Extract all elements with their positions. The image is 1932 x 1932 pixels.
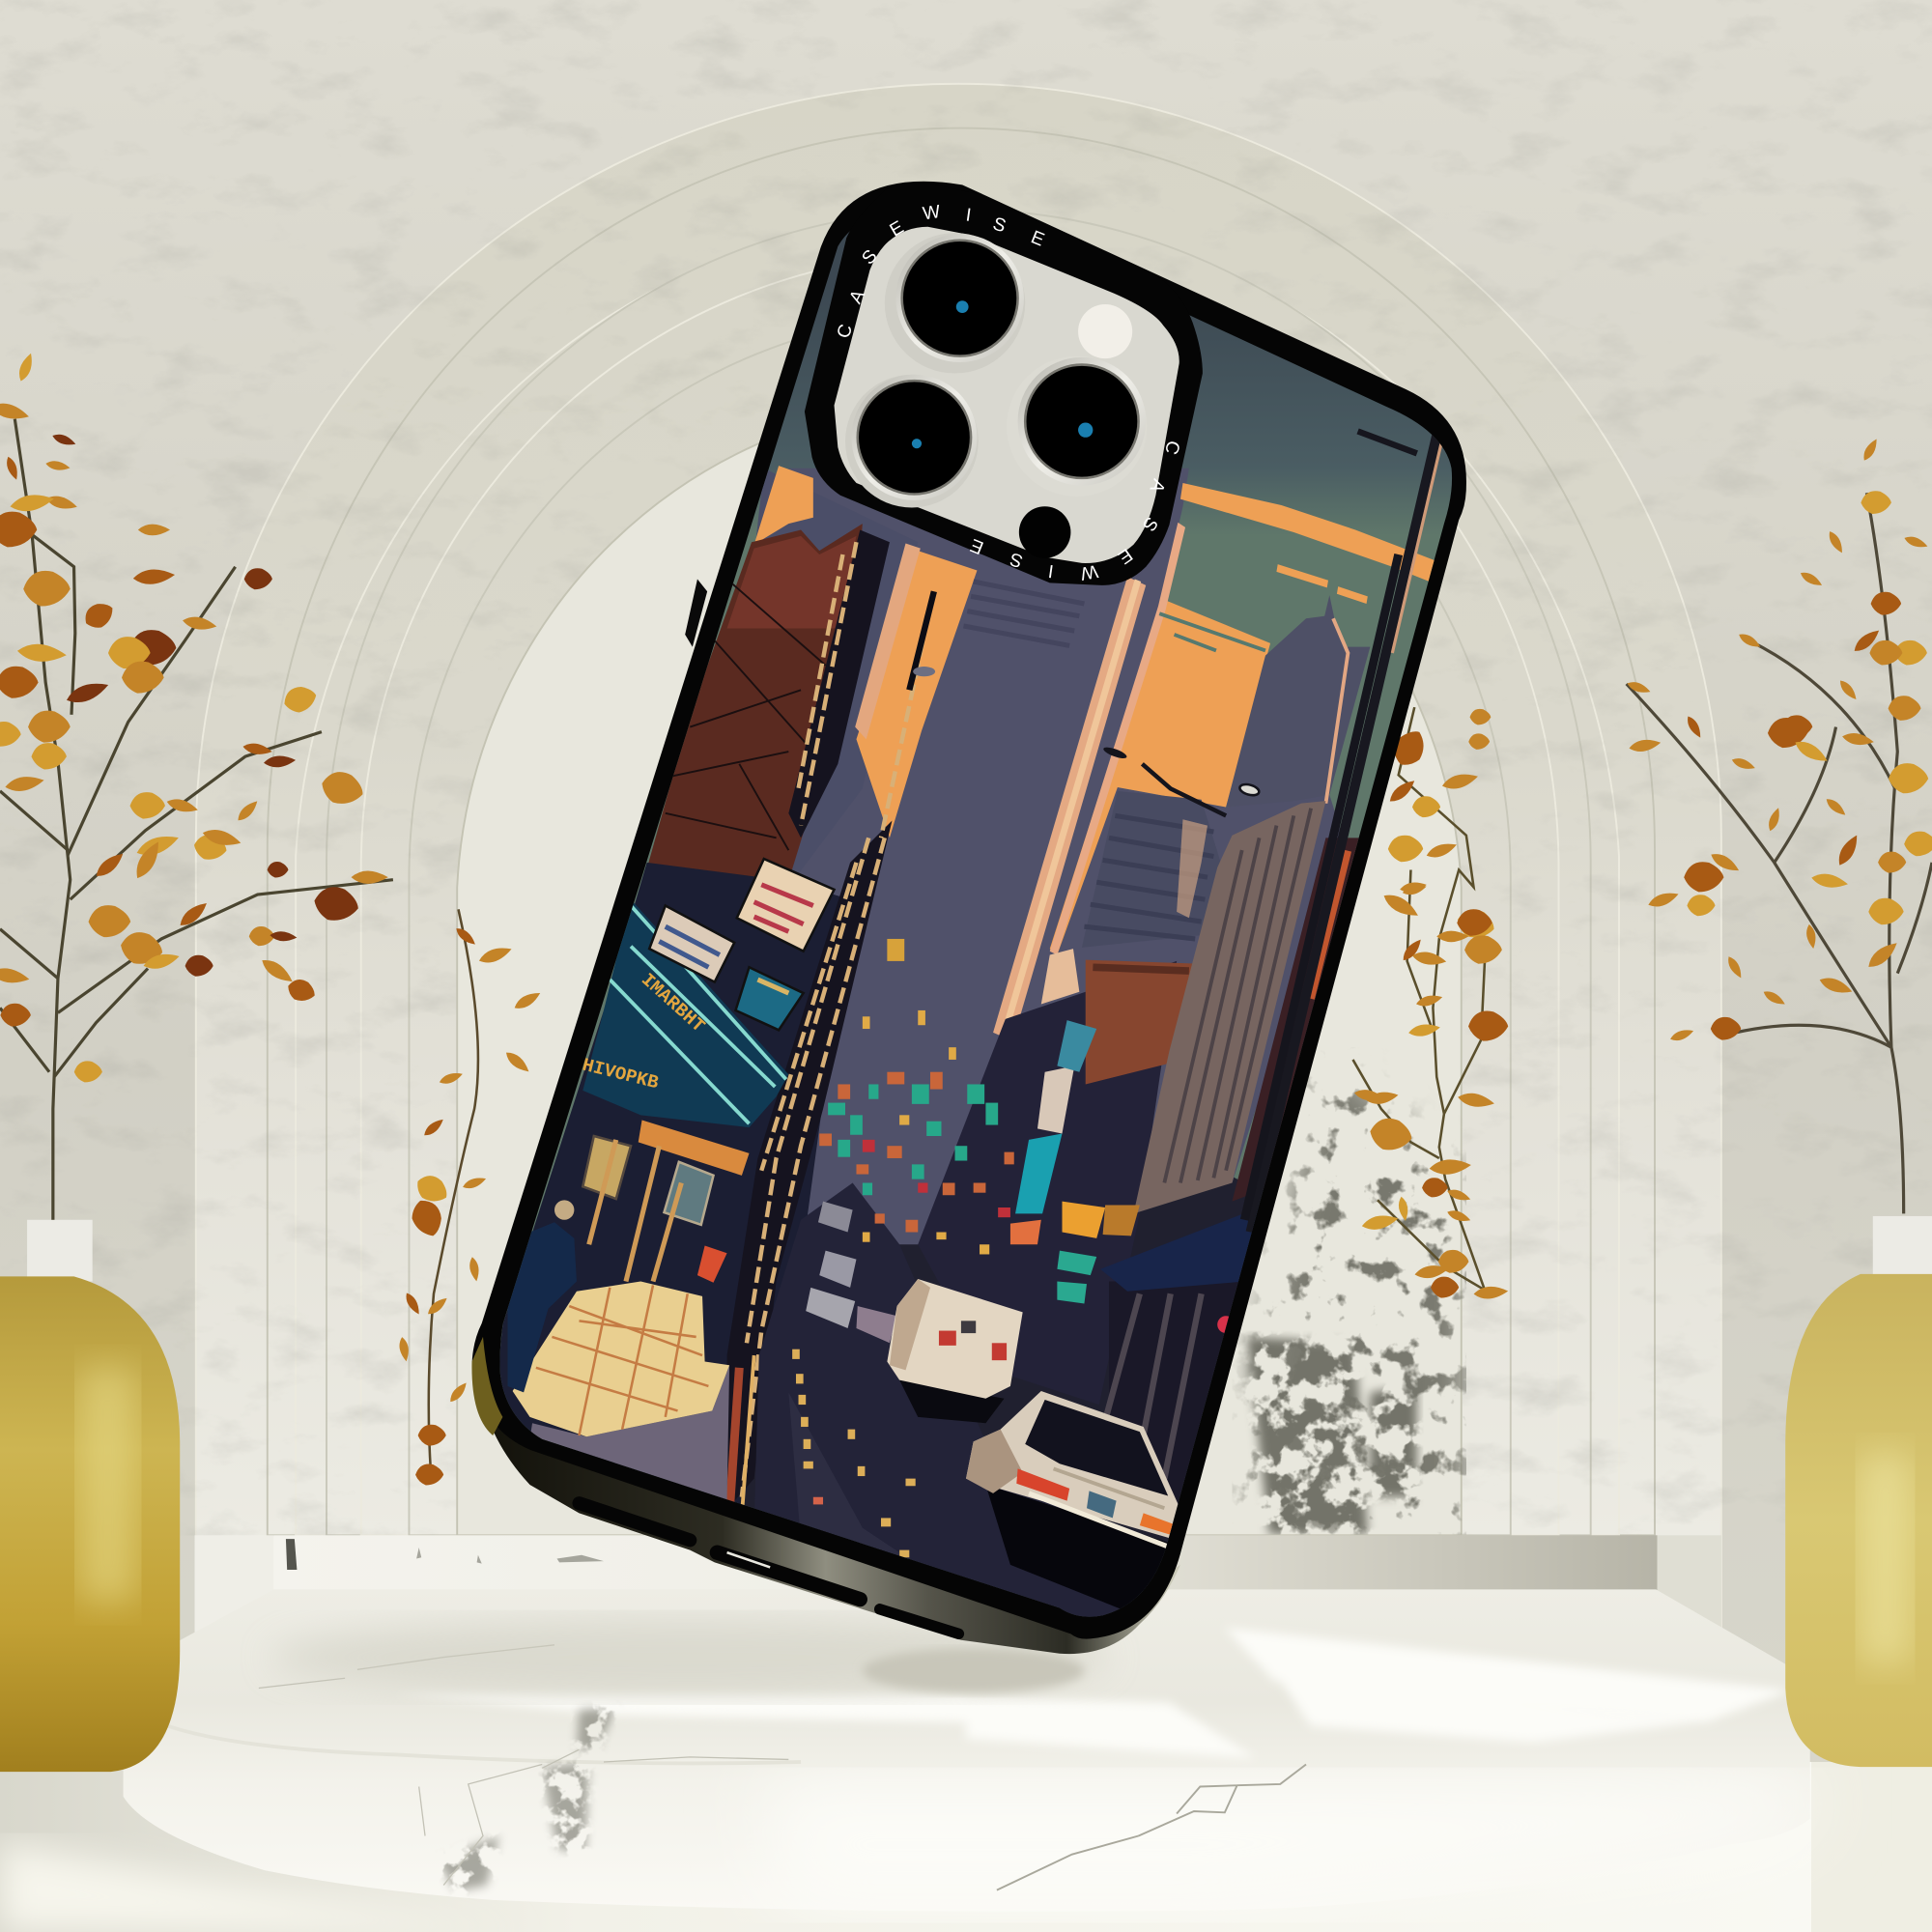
CASEWISE ring lettering: S — [990, 213, 1009, 237]
right street signs — [1010, 1020, 1235, 1333]
plant: far left branches — [0, 352, 393, 1220]
CASEWISE ring lettering: S — [858, 246, 882, 269]
CASEWISE ring lettering — [834, 202, 1183, 583]
dark lower city base — [734, 940, 1331, 1617]
CASEWISE ring lettering: C — [834, 322, 857, 341]
phone case body — [472, 182, 1466, 1639]
floor — [0, 1762, 1932, 1932]
CASEWISE ring lettering: I — [1047, 560, 1055, 581]
brick strip behind poles — [1233, 838, 1358, 1202]
CASEWISE ring lettering: I — [964, 205, 973, 226]
brick building — [647, 524, 863, 881]
lens: top — [885, 233, 1025, 373]
street lamps — [1102, 745, 1261, 815]
shop fronts and doors — [582, 1120, 750, 1283]
lens: bottom left — [845, 375, 979, 508]
left vase — [0, 1220, 180, 1772]
tower roof bands — [963, 582, 1084, 645]
marble texture over wall — [0, 0, 1932, 1535]
CASEWISE ring lettering: C — [1160, 438, 1183, 457]
central tower mass — [788, 469, 1343, 1244]
arch inner niche — [457, 401, 1466, 1535]
skyscraper right — [1226, 595, 1370, 807]
distant cars — [806, 1202, 897, 1343]
white sedan — [966, 1391, 1180, 1627]
sky — [500, 231, 1453, 1617]
road markings — [771, 1350, 934, 1600]
left orange wedge — [856, 551, 977, 838]
marble veins — [441, 1704, 616, 1895]
phone bottom slots — [579, 1503, 958, 1634]
sunlit pavement — [513, 1282, 729, 1436]
pedestal rim highlight — [124, 1703, 801, 1763]
road — [754, 1182, 1182, 1638]
base wall under columns — [195, 1535, 1721, 1659]
CASEWISE ring lettering: E — [887, 217, 907, 242]
phone side wall — [475, 1355, 1180, 1654]
plant: far right branches — [1626, 437, 1932, 1213]
CASEWISE ring lettering: A — [1145, 476, 1169, 496]
flash — [1078, 304, 1132, 358]
CASEWISE ring lettering: S — [1138, 513, 1161, 534]
striped building — [1082, 791, 1221, 948]
phone shadow on pedestal — [271, 1618, 1109, 1696]
right vase — [1785, 1216, 1932, 1767]
pole band — [727, 529, 935, 1516]
gray pavement — [529, 1365, 729, 1501]
blue awning — [581, 899, 788, 1127]
phone — [469, 173, 1479, 1654]
camera plate — [835, 227, 1179, 563]
pedestal — [124, 1589, 1810, 1912]
traffic lights and bokeh — [819, 939, 1014, 1254]
CASEWISE ring lettering: S — [1008, 548, 1026, 571]
plant: inner right vine — [1353, 707, 1509, 1300]
hanging signs — [649, 859, 835, 1030]
orange sunset block — [1041, 523, 1270, 1005]
arch with concentric rings — [196, 84, 1721, 1651]
CASEWISE ring lettering: E — [1114, 544, 1136, 568]
left gray tower — [755, 470, 788, 539]
awning lettering lower: HIVOPKB — [581, 1055, 661, 1094]
lens: bottom right — [1007, 356, 1148, 497]
white van — [887, 1279, 1023, 1423]
clouds — [1180, 483, 1435, 604]
camera bumper ring — [805, 183, 1203, 585]
left striped pillar — [855, 543, 921, 739]
microphone dot — [1019, 506, 1070, 558]
phone side buttons — [685, 579, 707, 647]
left storefront block — [493, 863, 850, 1516]
tall lamp poles — [1244, 425, 1444, 1233]
CASEWISE ring lettering: E — [1028, 227, 1047, 251]
CASEWISE ring lettering: E — [968, 534, 986, 557]
front face glow — [764, 1780, 1810, 1910]
top left orange sky — [754, 466, 813, 545]
CASEWISE ring lettering: W — [1079, 560, 1099, 583]
pedestrian — [508, 1200, 577, 1392]
crosswalk marks — [815, 1535, 1001, 1616]
sunlight patches — [394, 1628, 1792, 1758]
plant: inner left vine — [398, 909, 543, 1486]
CASEWISE ring lettering: A — [845, 287, 869, 307]
phone artwork: pixel city street — [500, 231, 1453, 1617]
right side buildings — [918, 801, 1346, 1552]
awning lettering: IMARBHT — [637, 969, 709, 1037]
CASEWISE ring lettering: W — [922, 202, 942, 224]
striped pillar — [993, 577, 1146, 1041]
